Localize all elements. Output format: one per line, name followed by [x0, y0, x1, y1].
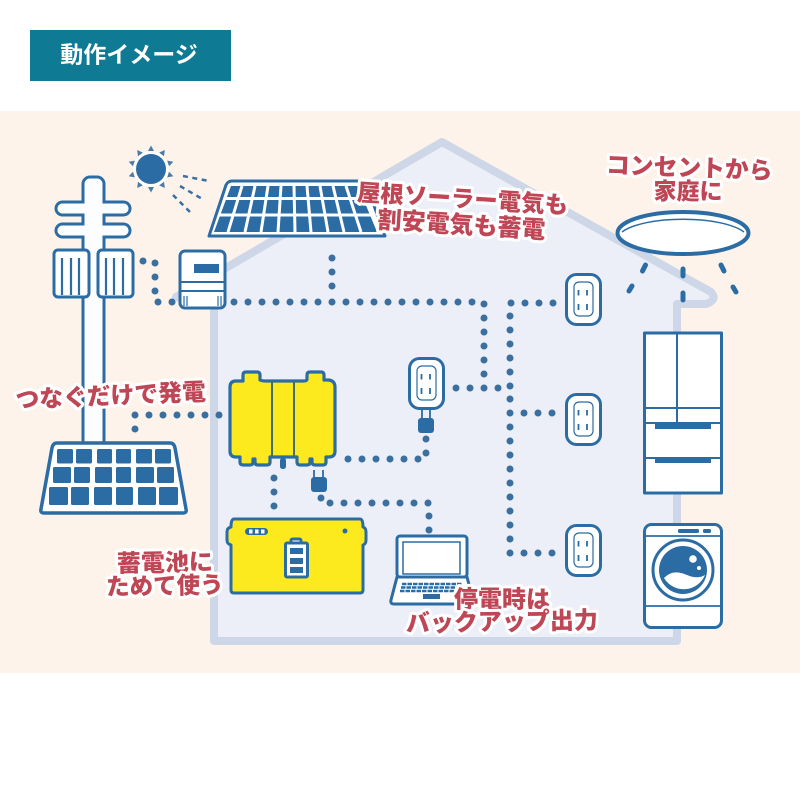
- icon: washing machine: [644, 524, 722, 628]
- label: outlet to home: [606, 152, 773, 204]
- icon: utility pole: [54, 177, 133, 448]
- label: roof solar: 割安電気も蓄電: [377, 206, 546, 244]
- icon: laptop: [391, 536, 473, 604]
- icon: storage battery: [227, 519, 366, 593]
- house outline: [176, 142, 714, 641]
- label: backup output: 停電時は: [454, 586, 550, 614]
- icon: outlet bottom: [566, 526, 600, 576]
- label: outlet to home: 家庭に: [654, 178, 722, 204]
- label: outlet to home: コンセントから: [606, 152, 773, 185]
- label: store in battery: [106, 549, 224, 600]
- wiring dots: [132, 254, 556, 556]
- panel: peach background: [0, 111, 800, 673]
- icon: power meter: [180, 251, 225, 308]
- icon: outlet middle: [566, 394, 600, 444]
- icon: ceiling light: [618, 212, 748, 300]
- label: backup output: バックアップ出力: [406, 607, 598, 638]
- icon: outlet with plug: [410, 358, 444, 433]
- label: roof solar: 屋根ソーラー電気も: [356, 178, 569, 219]
- icon: refrigerator: [644, 333, 722, 493]
- icon: small solar panel: [41, 443, 186, 513]
- label: backup output: [406, 586, 598, 638]
- heading: title box: 動作イメージ: [60, 42, 198, 68]
- heading: title box: [30, 30, 231, 81]
- label: roof solar: [356, 178, 569, 244]
- label: store in battery: ためて使う: [106, 572, 224, 600]
- icon: roof solar panel: [209, 181, 385, 236]
- icon: plug under inverter: [311, 470, 327, 492]
- icon: inverter: [230, 372, 335, 469]
- icon: sun with rays: [128, 146, 209, 214]
- label: connect and generate: つなぐだけで発電: [15, 379, 207, 414]
- icon: outlet top: [566, 274, 600, 324]
- label: store in battery: 蓄電池に: [117, 549, 213, 578]
